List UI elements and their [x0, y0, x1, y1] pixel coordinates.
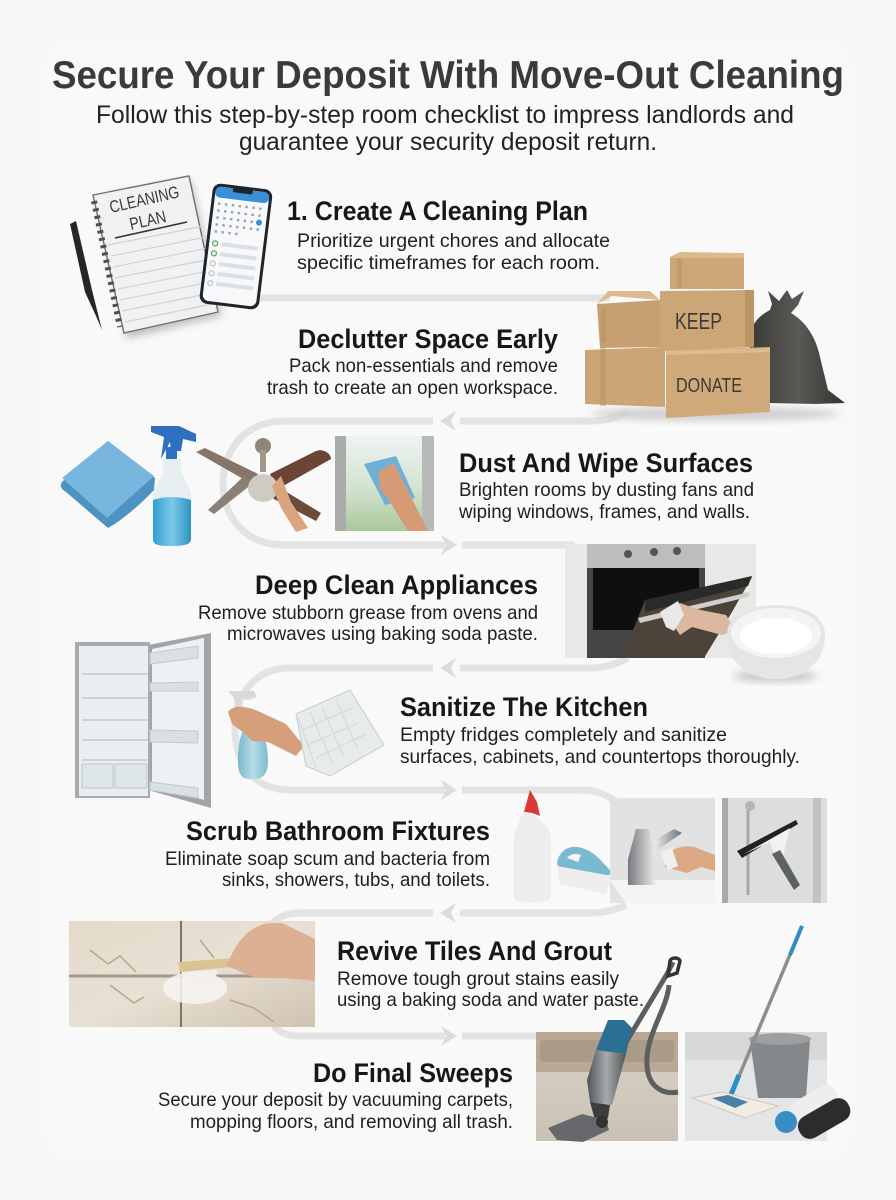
connector path: step 1 to 2	[250, 294, 610, 302]
icon: open fridge	[75, 633, 211, 808]
step 6 heading and text: sinks, showers, tubs, and toilets.	[222, 869, 490, 891]
step 7 heading and text: using a baking soda and water paste.	[337, 989, 644, 1011]
step 1 heading and text: 1. Create A Cleaning Plan	[287, 196, 588, 226]
connector path: step 4 to 5 to 6	[235, 658, 628, 802]
icon: spray bottle	[151, 426, 196, 546]
icon: notebook	[93, 176, 222, 339]
connector path: step 6 to 7 to 8	[268, 903, 626, 1046]
step 8 heading and text: mopping floors, and removing all trash.	[190, 1111, 513, 1133]
subtitle: Follow this step-by-step room checklist to impress landlords and	[96, 101, 794, 129]
image: faucet	[610, 798, 715, 903]
icon: DONATE box	[666, 347, 770, 418]
step 3 heading and text: wiping windows, frames, and walls.	[458, 501, 750, 523]
step 2 illustration: boxes and trash bag	[585, 252, 845, 421]
step 3 heading and text	[458, 448, 754, 523]
icon: notebook: CLEANING	[108, 182, 181, 217]
title: Secure Your Deposit With Move-Out Cleaning	[52, 54, 844, 97]
icon: hand with spray bottle	[228, 691, 304, 779]
icon: blue cloth	[61, 441, 155, 528]
step 1 heading and text: specific timeframes for each room.	[297, 252, 600, 274]
subtitle	[96, 101, 794, 156]
step 7 heading and text: Revive Tiles And Grout	[337, 936, 612, 966]
step 6 heading and text: Scrub Bathroom Fixtures	[186, 816, 490, 846]
icon: notebook: PLAN	[128, 207, 168, 234]
icon: small top box	[670, 252, 744, 289]
image: floor with mop and bucket	[685, 926, 854, 1143]
icon: trash bag	[750, 290, 845, 404]
step 8 heading and text: Secure your deposit by vacuuming carpets,	[158, 1089, 513, 1111]
icon: open box	[597, 291, 660, 348]
icon: KEEP box: KEEP	[675, 308, 722, 334]
icon: phone	[199, 183, 273, 310]
step 7 heading and text: Remove tough grout stains easily	[337, 968, 619, 990]
step 8 heading and text	[158, 1058, 513, 1133]
icon: DONATE box: DONATE	[676, 375, 742, 397]
step 6 heading and text: Eliminate soap scum and bacteria from	[165, 848, 490, 870]
step 4 heading and text: Remove stubborn grease from ovens and	[198, 602, 538, 624]
icon: white towel	[296, 690, 384, 776]
step 2 heading and text: trash to create an open workspace.	[267, 377, 558, 399]
step 2 heading and text: Pack non-essentials and remove	[289, 355, 558, 377]
step 6 heading and text	[165, 816, 490, 891]
step 3 illustration: cloth, spray, fan and window	[61, 426, 434, 546]
connector path: step 2 to 3 to 4	[223, 411, 628, 555]
icon: ceiling fan with hand	[196, 438, 331, 532]
icon: pen	[70, 221, 102, 330]
step 2 heading and text	[267, 324, 558, 399]
icon: box bottom-left	[585, 347, 665, 407]
step 5 illustration: fridge, spray and towel	[75, 633, 384, 808]
step 4 heading and text: Deep Clean Appliances	[255, 570, 538, 600]
step 6 illustration: bleach, brush, faucet and squeegee	[514, 790, 827, 903]
step 7 illustration: tile scrubbing photo	[69, 921, 315, 1027]
step 5 heading and text: Sanitize The Kitchen	[400, 692, 648, 722]
image: oven	[565, 544, 756, 658]
step 3 heading and text: Dust And Wipe Surfaces	[459, 448, 753, 478]
step 4 heading and text: microwaves using baking soda paste.	[227, 623, 538, 645]
icon: baking soda bowl	[727, 605, 825, 682]
step 1 heading and text: Prioritize urgent chores and allocate	[297, 230, 610, 252]
icon: bleach bottle	[514, 790, 551, 902]
step 5 heading and text: surfaces, cabinets, and countertops thoroughly.	[400, 746, 800, 768]
image: shower and squeegee	[722, 798, 827, 903]
image: carpet with vacuum	[536, 958, 680, 1142]
step 1 illustration: notebook, pen and phone	[70, 176, 273, 339]
step 1 heading and text	[287, 196, 610, 274]
step 5 heading and text: Empty fridges completely and sanitize	[400, 724, 727, 746]
icon: scrub brush	[557, 847, 613, 894]
step 2 heading and text: Declutter Space Early	[298, 324, 558, 354]
icon: KEEP box	[660, 290, 754, 351]
step 8 heading and text: Do Final Sweeps	[313, 1058, 513, 1088]
step 4 heading and text	[198, 570, 538, 645]
subtitle: guarantee your security deposit return.	[239, 128, 657, 156]
step 5 heading and text	[400, 692, 800, 768]
image: window wiping	[335, 436, 434, 531]
step 8 illustration: vacuum and mop	[536, 926, 854, 1143]
step 3 heading and text: Brighten rooms by dusting fans and	[459, 479, 754, 501]
step 4 illustration: oven and baking soda bowl	[565, 544, 825, 682]
step 7 heading and text	[337, 936, 644, 1011]
